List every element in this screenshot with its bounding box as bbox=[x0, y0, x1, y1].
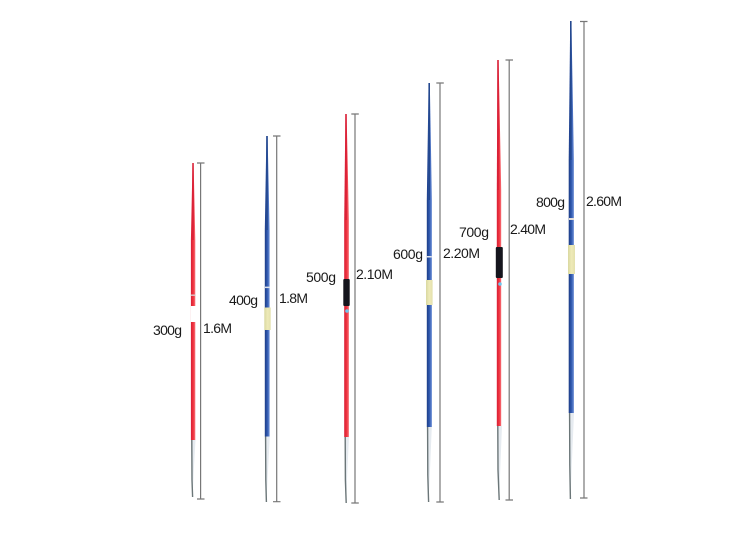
label 700g: 700g bbox=[459, 224, 489, 240]
label 2.40M: 2.40M bbox=[510, 221, 546, 237]
label 400g: 400g bbox=[229, 292, 258, 308]
javelin 800g bbox=[536, 21, 622, 499]
label 600g: 600g bbox=[393, 246, 423, 262]
javelin 400g bbox=[229, 136, 308, 502]
label 800g: 800g bbox=[536, 194, 565, 210]
label 500g: 500g bbox=[306, 269, 336, 285]
label 300g: 300g bbox=[153, 322, 182, 338]
ruler 1.6M bbox=[197, 163, 204, 499]
grip marker bbox=[345, 309, 349, 313]
javelin 600g bbox=[393, 83, 480, 502]
ruler 1.8M bbox=[273, 136, 280, 502]
label 2.60M: 2.60M bbox=[586, 193, 622, 209]
label 2.20M: 2.20M bbox=[443, 245, 480, 261]
javelin 700g bbox=[459, 60, 546, 500]
grip marker bbox=[498, 282, 502, 286]
ruler 2.20M bbox=[436, 83, 444, 502]
label 2.10M: 2.10M bbox=[356, 266, 393, 282]
label 1.6M: 1.6M bbox=[203, 320, 232, 336]
javelin 500g bbox=[306, 114, 393, 503]
ruler 2.60M bbox=[580, 22, 588, 498]
label 1.8M: 1.8M bbox=[279, 290, 308, 306]
ruler 2.40M bbox=[506, 60, 513, 500]
ruler 2.10M bbox=[351, 114, 359, 503]
javelin 300g bbox=[153, 163, 232, 499]
